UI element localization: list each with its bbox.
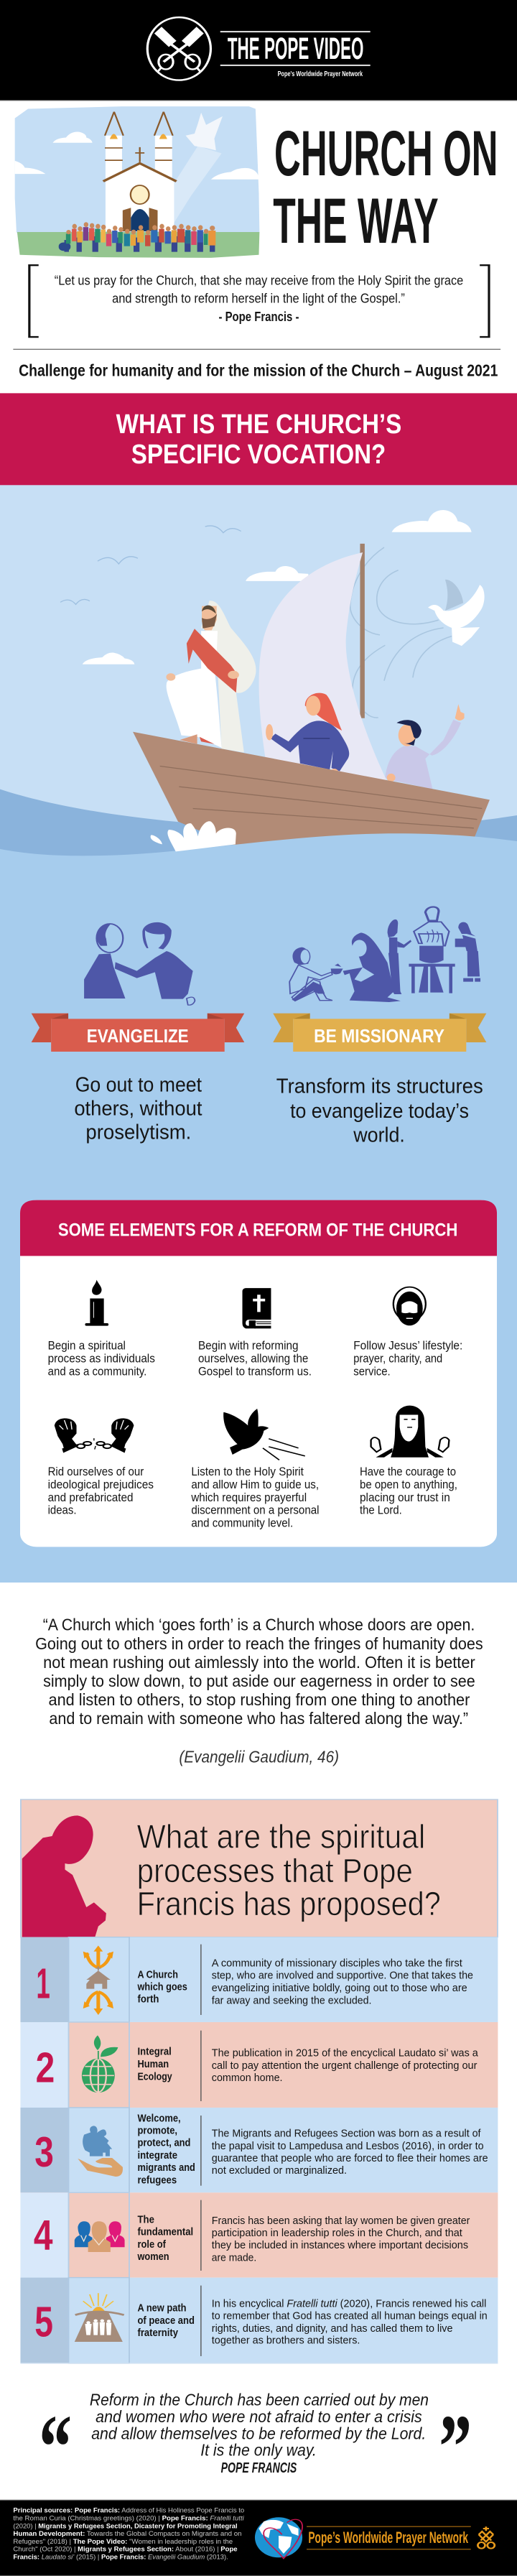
text: courage: the Lord. <box>360 1504 402 1517</box>
row 3: integrate <box>137 2149 177 2161</box>
row 2: common home. <box>212 2072 283 2083</box>
panel: rows 2 to 5 <box>20 2022 498 2364</box>
text: Jesus' lifestyle: Follow Jesus’ lifestyle: <box>353 1339 462 1353</box>
text: reforming ourselves: ourselves, allowing the <box>198 1352 308 1366</box>
logo wordmark <box>220 31 371 78</box>
sources <box>13 2507 244 2561</box>
text: ideological prejudices: and prefabricated <box>48 1491 134 1504</box>
icon: peace and fraternity path <box>75 2293 124 2342</box>
text: Holy Spirit: discernment on a personal <box>191 1504 320 1517</box>
text: courage: be open to anything, <box>360 1478 457 1491</box>
row 3: protect, and <box>137 2136 190 2149</box>
ribbon: be missionary: BE MISSIONARY <box>314 1026 444 1047</box>
sources: Human Development: Towards the Global Compacts on Migrants and on <box>13 2530 242 2537</box>
quote: Evangelii Gaudium <box>35 1616 483 1766</box>
text: Holy Spirit <box>191 1465 320 1530</box>
row 4: role of <box>137 2238 166 2250</box>
row 1: forth <box>137 1993 159 2005</box>
text: evangelize: others, without <box>74 1097 202 1120</box>
row 3: 3 <box>34 2128 54 2176</box>
heading band: SPECIFIC VOCATION? <box>131 440 386 470</box>
icon: Holy Spirit dove <box>223 1409 305 1460</box>
figure: Jesus <box>166 601 256 752</box>
row 1: 1 <box>37 1960 50 2008</box>
footer band <box>0 2500 517 2576</box>
row 2: 2 <box>36 2044 55 2092</box>
sources: Refugees" (2018) | The Pope Video: "Women in leadership roles in the <box>13 2538 233 2545</box>
text: be missionary <box>276 1075 483 1146</box>
row 2 <box>20 2022 498 2108</box>
icon: family in hand <box>78 2126 123 2177</box>
row 4: are made. <box>212 2251 256 2264</box>
row 3: refugees <box>137 2174 177 2186</box>
closing quote text <box>90 2391 429 2476</box>
text: courage: Have the courage to <box>360 1465 456 1478</box>
icon: dove <box>428 580 485 646</box>
icon: two people <box>84 922 195 1005</box>
sources: Principal sources: Pope Francis: Address of His Holiness Pope Francis to <box>13 2507 244 2514</box>
row 3: promote, <box>137 2124 177 2136</box>
clouds <box>83 510 472 664</box>
text: courage: placing our trust in <box>360 1491 450 1504</box>
blue background <box>0 876 517 1583</box>
crowd <box>59 222 215 252</box>
header band <box>0 0 517 101</box>
waves back <box>0 789 517 876</box>
section title <box>137 1818 441 1922</box>
sources: (2020) | Migrants y Refugees Section, Dicastery for Promoting Integral <box>13 2523 238 2530</box>
icon: candle <box>85 1280 108 1326</box>
row 2: Human <box>137 2058 169 2070</box>
ribbon: evangelize <box>32 1014 244 1052</box>
text: ideological prejudices: ideological prejudices <box>48 1478 154 1491</box>
panel: spiritual processes heading <box>20 1799 498 2022</box>
text: reforming ourselves: Begin with reforming <box>198 1339 299 1353</box>
icon: globe and heart <box>255 2517 302 2559</box>
text: be missionary: world. <box>353 1123 405 1146</box>
prayer quote: - Pope Francis - <box>218 309 299 324</box>
row 1: far away and seeking the excluded. <box>212 1994 372 2006</box>
text: spiritual process: and as a community. <box>48 1365 146 1379</box>
row 5: of peace and <box>137 2315 195 2326</box>
icon: Jesus head <box>393 1287 426 1325</box>
quote: Evangelii Gaudium: (Evangelii Gaudium, 46) <box>179 1748 339 1766</box>
row 5 <box>20 2278 498 2363</box>
section: vocation scene <box>0 393 517 876</box>
title <box>273 118 498 257</box>
row 1: A Church <box>137 1968 178 1980</box>
text: ideological prejudices: ideas. <box>48 1504 77 1517</box>
birds <box>60 526 241 604</box>
row 3: migrants and <box>137 2162 195 2173</box>
text: evangelize: Go out to meet <box>75 1073 202 1096</box>
sources: the Roman Curia (Christmas greetings) (2020) | Pope Francis: Fratelli tutti <box>13 2515 244 2522</box>
icon: people sharing food <box>289 907 480 1002</box>
text: courage <box>360 1465 457 1517</box>
sail <box>259 552 388 782</box>
text: spiritual process: process as individuals <box>48 1352 155 1366</box>
row 3: not excluded or marginalized. <box>212 2164 347 2176</box>
row 4: women <box>137 2251 169 2262</box>
hero section <box>13 106 500 380</box>
icon: opening quote mark: “ <box>39 2396 72 2498</box>
row 4: The <box>137 2213 154 2225</box>
row 3: Welcome, <box>137 2112 181 2124</box>
icon: three women <box>75 2221 125 2252</box>
closing quote and footer <box>0 2391 517 2576</box>
text: Holy Spirit: which requires prayerful <box>191 1491 307 1504</box>
silhouette: Pope Francis <box>22 1815 106 1937</box>
row 2: Ecology <box>137 2070 172 2082</box>
row 1: which goes <box>137 1980 187 1993</box>
row 4 <box>20 2192 498 2278</box>
text: Jesus' lifestyle: service. <box>353 1365 391 1379</box>
row 4: fundamental <box>137 2225 193 2238</box>
text: ideological prejudices: Rid ourselves of our <box>48 1465 144 1478</box>
text: reforming ourselves <box>198 1339 312 1379</box>
icon: crossed keys logo <box>147 17 210 80</box>
closing quote text: It is the only way. <box>200 2441 317 2460</box>
row 5: together as brothers and sisters. <box>212 2334 360 2346</box>
row 4: 4 <box>34 2212 53 2259</box>
text: Holy Spirit: and community level. <box>191 1516 293 1530</box>
row 5: A new path <box>137 2302 186 2314</box>
heading band: WHAT IS THE CHURCH’S <box>116 409 401 440</box>
icon: left bracket <box>29 265 39 337</box>
icon: globe with leaves <box>82 2035 118 2093</box>
logo wordmark: Pope's Worldwide Prayer Network <box>278 70 363 78</box>
figure: man <box>385 704 465 789</box>
icon: closing quote mark: ” <box>439 2396 472 2498</box>
row 5: fraternity <box>137 2327 178 2338</box>
text: evangelize: proselytism. <box>85 1121 191 1144</box>
text: evangelize <box>74 1073 202 1144</box>
text: ideological prejudices <box>48 1465 154 1517</box>
text: spiritual process: Begin a spiritual <box>48 1339 126 1353</box>
text: reforming ourselves: Gospel to transform us. <box>198 1365 312 1379</box>
icon: broken chains <box>55 1418 134 1453</box>
text: Holy Spirit: and allow Him to guide us, <box>191 1478 319 1491</box>
icon: gold keys <box>478 2526 495 2549</box>
text: Jesus' lifestyle <box>353 1339 462 1379</box>
text: Jesus' lifestyle: prayer, charity, and <box>353 1352 442 1366</box>
panel: reform elements <box>20 1200 497 1547</box>
closing quote text: POPE FRANCIS <box>221 2460 297 2476</box>
prayer quote <box>55 273 463 324</box>
mast <box>360 544 365 718</box>
wind lines <box>350 547 452 718</box>
icon: bible <box>243 1288 271 1328</box>
icon: church going forth <box>83 1945 113 2015</box>
ribbon: evangelize: EVANGELIZE <box>87 1026 189 1047</box>
figure: woman <box>266 693 349 776</box>
row 5: 5 <box>34 2298 53 2346</box>
icon: praying woman <box>371 1406 449 1458</box>
boat <box>133 732 490 846</box>
row 2: Integral <box>137 2045 172 2057</box>
illustration: church and crowd <box>15 106 259 258</box>
row 3 <box>20 2108 498 2192</box>
sources: Francis: Laudato si’ (2015) | Pope Francis: Evangelii Gaudium (2013). <box>13 2554 228 2561</box>
waves front <box>0 833 517 876</box>
heading band <box>0 393 517 485</box>
ribbon: be missionary <box>273 1014 486 1052</box>
sources: Church" (Oct 2020) | Migrants y Refugees Section: About (2016) | Pope <box>13 2546 238 2553</box>
panel heading <box>20 1200 497 1256</box>
row 1 <box>20 1937 498 2022</box>
section: evangelize and missionary <box>32 907 486 1146</box>
text: Holy Spirit: Listen to the Holy Spirit <box>191 1465 304 1478</box>
splash <box>151 821 236 851</box>
icon: right bracket <box>480 265 489 337</box>
text: spiritual process <box>48 1339 155 1379</box>
